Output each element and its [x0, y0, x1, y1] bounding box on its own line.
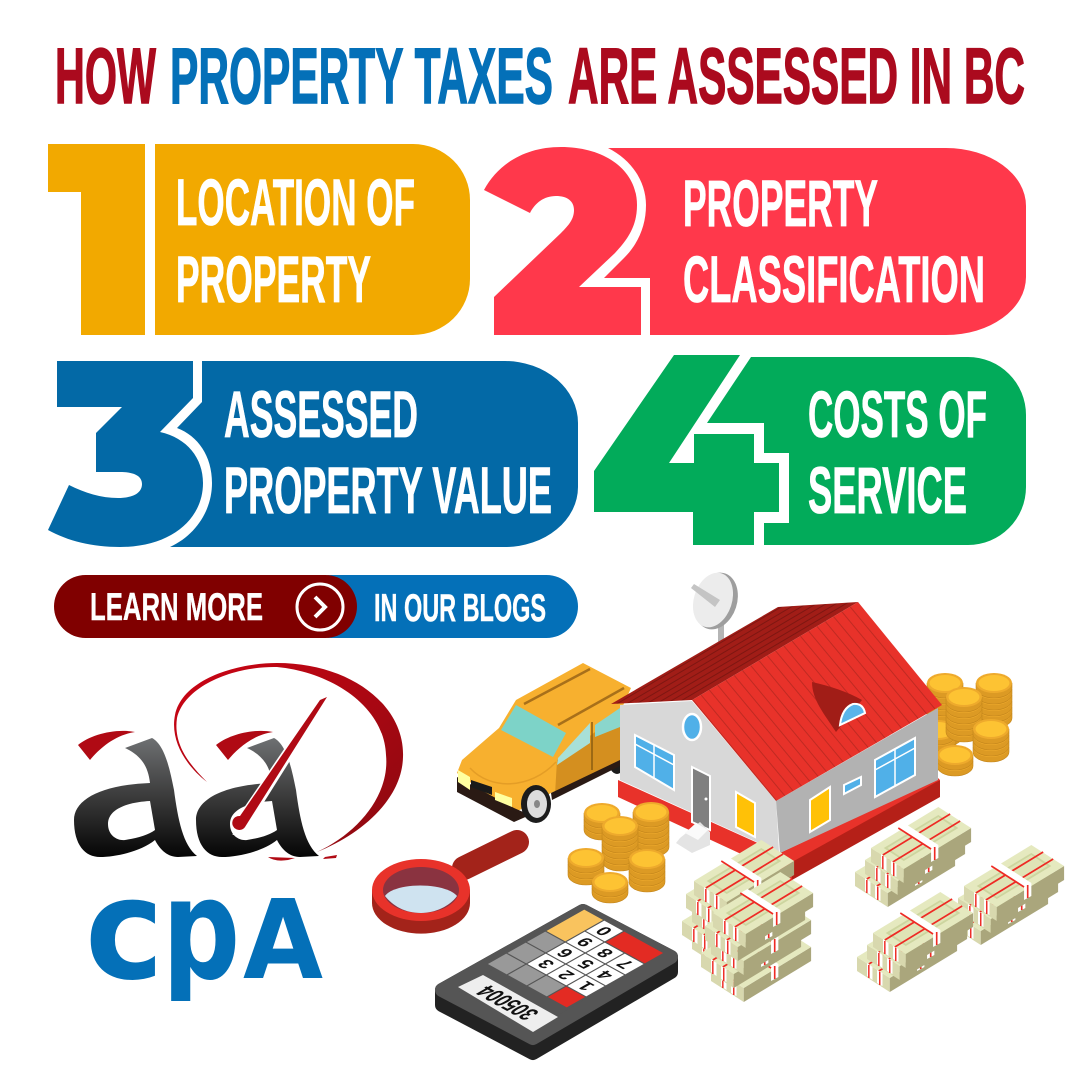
dark red pill — [54, 575, 357, 638]
numeral 4 — [594, 355, 779, 545]
round gable window — [683, 714, 701, 740]
logo red swoosh — [174, 663, 403, 852]
logo: aa CPA — [74, 663, 403, 1012]
right blue window — [875, 738, 915, 797]
key digits — [533, 924, 638, 993]
numeral 1 — [48, 144, 145, 335]
panel 3 label: ASSESSED — [224, 377, 418, 451]
illustration: car — [457, 663, 631, 823]
money stack far right — [948, 845, 1064, 945]
panel 2: property classification — [484, 147, 1026, 335]
money stack right bottom — [857, 892, 973, 992]
house right wall — [776, 708, 938, 853]
bumper — [457, 777, 530, 822]
door — [692, 767, 710, 830]
panel 1 label — [176, 165, 415, 316]
illustration: satellite dish — [686, 567, 745, 642]
logo red accents — [78, 731, 337, 861]
blue pill — [300, 575, 578, 638]
key digits: 3 — [533, 957, 559, 971]
logo aa letters — [74, 738, 319, 857]
panel 1 box — [155, 144, 470, 335]
dormer — [812, 682, 865, 732]
panel 2 label — [683, 166, 985, 316]
house base front — [618, 780, 792, 880]
panel 1: location of property — [48, 144, 470, 335]
key digits: 0 — [591, 924, 617, 938]
logo CPA wordmark: p — [162, 848, 240, 1011]
illustration: money stacks — [682, 807, 1064, 1002]
money stack back — [682, 840, 794, 970]
panel 3 label — [224, 377, 552, 527]
house base side — [780, 780, 940, 880]
car body — [457, 663, 631, 813]
yellow window right wall — [810, 787, 830, 832]
panel 4: costs of service — [594, 355, 1026, 545]
side windows — [557, 723, 590, 765]
calculator display — [458, 975, 558, 1032]
panel 1 label: LOCATION OF — [176, 165, 415, 239]
left blue window — [635, 735, 674, 790]
panel 4 label — [808, 377, 987, 527]
money stack right top — [855, 807, 971, 907]
key digits: 5 — [573, 957, 599, 971]
logo CPA wordmark: c — [85, 849, 164, 1012]
front wheel — [521, 785, 551, 823]
panel 2 label: PROPERTY — [683, 166, 878, 240]
logo needle — [232, 697, 327, 832]
rear wheel — [608, 742, 626, 774]
key digits: 2 — [553, 968, 579, 982]
panel 2 box — [604, 148, 1026, 335]
calculator face — [442, 911, 671, 1038]
illustration: house — [611, 602, 942, 880]
headlights — [458, 770, 470, 790]
logo CPA wordmark: A — [243, 877, 323, 1005]
panel 3 label: PROPERTY VALUE — [224, 453, 552, 527]
key digits: 4 — [592, 968, 618, 982]
illustration: coins in front — [568, 802, 669, 903]
windshield — [501, 705, 566, 757]
panel 3 box — [170, 361, 578, 547]
panel 4 box — [707, 357, 1026, 545]
illustration: magnifying glass — [372, 842, 517, 934]
hood edge — [470, 762, 556, 784]
calculator display: 305004 — [470, 982, 545, 1023]
money stack front — [701, 872, 813, 1002]
key digits: 7 — [612, 957, 638, 971]
key digits: 8 — [592, 946, 618, 960]
calculator side — [442, 911, 671, 1053]
learn more text: LEARN MORE — [90, 586, 263, 629]
entry steps — [676, 822, 710, 853]
calculator keys — [488, 910, 663, 1007]
blogs text: IN OUR BLOGS — [374, 587, 546, 630]
car side — [555, 713, 621, 795]
title: HOW — [55, 31, 156, 120]
yellow window left wall — [736, 792, 755, 837]
small window — [844, 777, 861, 794]
front roof — [692, 602, 942, 801]
house left wall — [620, 701, 779, 852]
panel 1 label: PROPERTY — [176, 242, 371, 316]
logo CPA wordmark — [90, 898, 322, 1001]
key digits: 9 — [572, 935, 598, 949]
key digits: 6 — [552, 946, 578, 960]
panel 3: assessed property value — [48, 361, 578, 547]
roof lines — [524, 669, 590, 704]
illustration: calculator — [442, 910, 671, 1053]
learn more button — [54, 575, 578, 638]
title: PROPERTY TAXES — [170, 31, 553, 120]
illustration: coins behind house — [920, 673, 1012, 776]
numeral 2 — [484, 147, 641, 335]
key digits: 1 — [573, 979, 599, 993]
back roof — [611, 602, 858, 704]
grille — [471, 780, 492, 795]
numeral 3 — [48, 361, 203, 547]
icon: arrow circle — [297, 584, 343, 630]
